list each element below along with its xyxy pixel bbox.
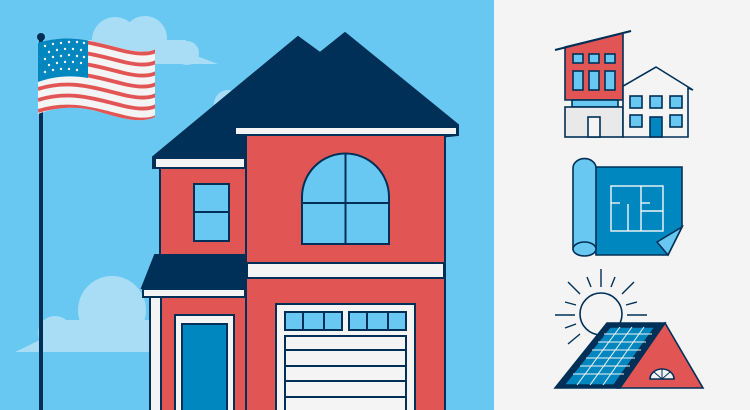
cloud: top bbox=[86, 16, 218, 65]
flag bbox=[38, 38, 155, 120]
left wing wall bbox=[160, 168, 246, 268]
porch eave bbox=[143, 289, 245, 297]
small window bbox=[194, 184, 229, 241]
door bbox=[175, 315, 234, 410]
middle band bbox=[247, 263, 444, 278]
flagpole bbox=[37, 33, 45, 410]
sky background bbox=[0, 0, 494, 410]
left wing eave bbox=[155, 158, 245, 168]
house bbox=[142, 33, 458, 410]
upper right wall bbox=[246, 135, 445, 410]
icon: blueprint bbox=[573, 159, 682, 256]
pillar bbox=[150, 297, 161, 410]
cloud: behind house bbox=[214, 90, 242, 118]
cloud: bottom bbox=[15, 276, 150, 352]
icon: solar roof bbox=[555, 269, 703, 388]
garage bbox=[276, 304, 415, 410]
icon: buildings bbox=[555, 31, 693, 137]
upper eave bbox=[235, 127, 457, 135]
lower left wall bbox=[161, 297, 246, 410]
right panel background bbox=[494, 0, 750, 410]
porch roof bbox=[142, 255, 246, 288]
arched window bbox=[302, 154, 389, 244]
roof bbox=[153, 33, 458, 168]
